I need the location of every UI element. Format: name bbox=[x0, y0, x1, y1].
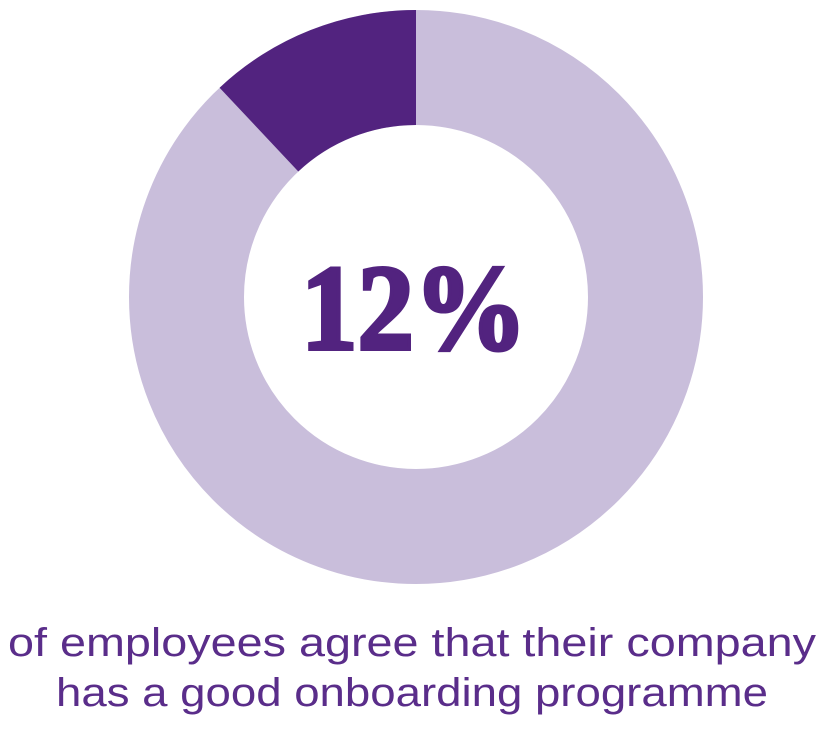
caption text bbox=[8, 621, 816, 715]
big percentage: 12% bbox=[301, 241, 527, 376]
caption text: of employees agree that their company bbox=[8, 621, 816, 665]
ring: highlighted 12% segment bbox=[220, 10, 416, 171]
caption text: has a good onboarding programme bbox=[56, 671, 768, 715]
ring: remaining 88% bbox=[186, 68, 646, 526]
